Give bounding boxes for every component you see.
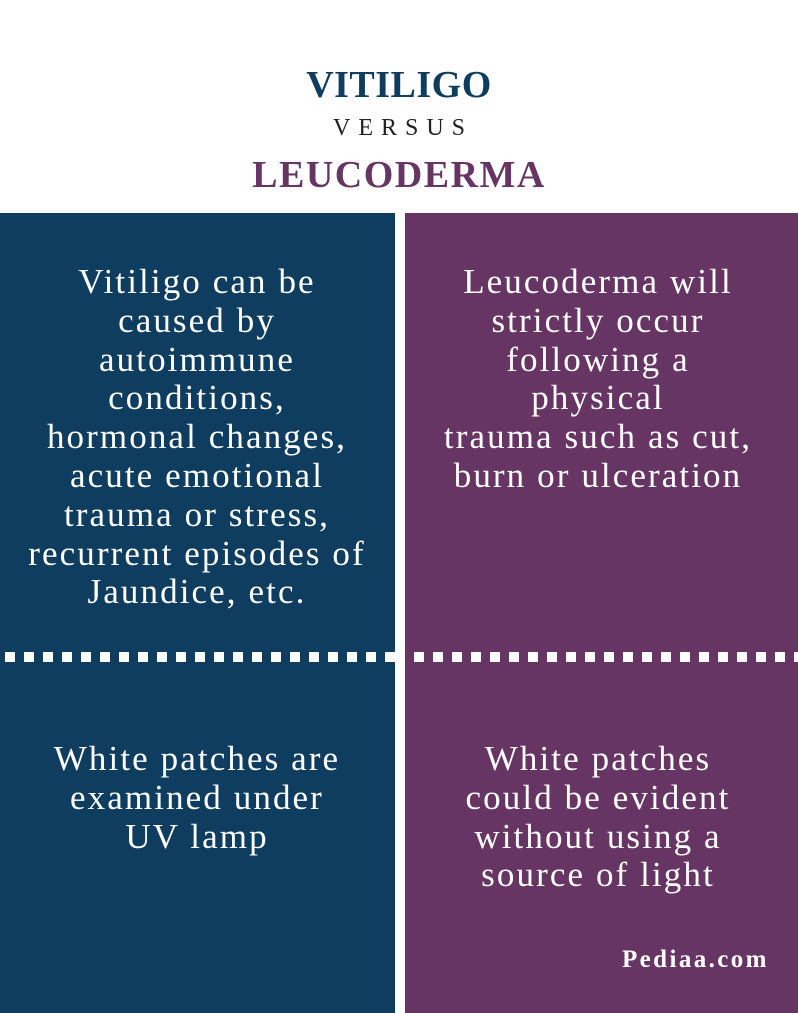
- text: vitiligo causes: [28, 262, 366, 611]
- text: leucoderma diagnosis: without using a: [474, 817, 722, 856]
- text: vitiligo causes: Jaundice, etc.: [88, 572, 306, 611]
- text: leucoderma causes: trauma such as cut,: [444, 417, 752, 456]
- text: leucoderma causes: Leucoderma will: [463, 262, 733, 301]
- panel: leucoderma: [405, 213, 798, 1013]
- panel: vitiligo: [0, 213, 395, 1013]
- text: leucoderma causes: strictly occur: [491, 301, 705, 340]
- text: vitiligo causes: recurrent episodes of: [28, 534, 366, 573]
- logo: Pediaa.com: [622, 946, 769, 973]
- text: vitiligo causes: Vitiligo can be: [78, 262, 316, 301]
- title: [252, 64, 546, 196]
- text: vitiligo causes: conditions,: [108, 378, 286, 417]
- heading: vitiligo: VITILIGO: [306, 64, 492, 106]
- text: leucoderma causes: physical: [531, 378, 665, 417]
- text: vitiligo causes: hormonal changes,: [47, 417, 347, 456]
- heading: leucoderma: LEUCODERMA: [252, 154, 546, 196]
- text: vitiligo causes: autoimmune: [99, 340, 295, 379]
- text: vitiligo causes: acute emotional: [70, 456, 324, 495]
- text: vitiligo diagnosis: examined under: [70, 778, 324, 817]
- text: vitiligo diagnosis: [54, 739, 340, 856]
- text: leucoderma diagnosis: White patches: [485, 739, 711, 778]
- text: leucoderma diagnosis: source of light: [481, 855, 715, 894]
- text: leucoderma causes: following a: [506, 340, 690, 379]
- text: leucoderma causes: [444, 262, 752, 495]
- text: vitiligo diagnosis: UV lamp: [125, 817, 269, 856]
- text: leucoderma causes: burn or ulceration: [454, 456, 742, 495]
- heading: versus: VERSUS: [333, 115, 473, 141]
- text: vitiligo causes: caused by: [118, 301, 276, 340]
- text: vitiligo diagnosis: White patches are: [54, 739, 340, 778]
- text: vitiligo causes: trauma or stress,: [64, 495, 330, 534]
- text: leucoderma diagnosis: could be evident: [466, 778, 730, 817]
- text: leucoderma diagnosis: [466, 739, 730, 894]
